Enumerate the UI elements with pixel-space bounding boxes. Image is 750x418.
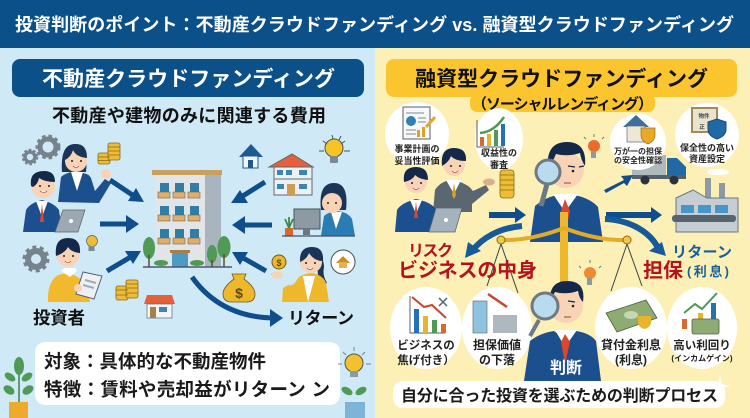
icon: coins	[98, 143, 120, 164]
icon: coins	[116, 280, 138, 300]
callout: target and features: 対象：具体的な不動産物件	[44, 351, 266, 372]
title banner: 投資判断のポイント：不動産クラウドファンディング vs. 融資型クラウドファンディング	[15, 14, 734, 35]
icon: house with red roof	[269, 154, 313, 195]
circle: collateral value decline: の下落	[479, 352, 515, 367]
circle: high yield: 高い利回り	[673, 338, 731, 352]
icon: sparkle	[709, 375, 731, 397]
person: man with laptop	[23, 171, 85, 232]
callout: decision process: 自分に合った投資を選ぶための判断プロセス	[401, 386, 718, 405]
section heading: real-estate crowdfunding: 不動産クラウドファンディング	[42, 67, 335, 91]
subheading: 不動産や建物のみに関連する費用	[52, 106, 326, 126]
label: interest: (利息)	[687, 264, 729, 279]
circle: collateral value decline: 担保価値	[473, 337, 521, 352]
icon: factory	[672, 169, 738, 232]
circle: secure asset setting: 保全性の高い	[680, 142, 734, 153]
arrowheads	[125, 188, 248, 265]
circle: business plan review: 妥当性評価	[394, 155, 440, 166]
icon: bulb	[579, 260, 601, 285]
circle: secure asset setting: 正	[699, 124, 705, 131]
icon: house	[144, 295, 175, 318]
circle: profitability review	[475, 108, 523, 170]
circle: collateral safety check: の安全性確認	[614, 155, 662, 165]
circle: loan interest	[595, 287, 667, 369]
icon: speech bubble with house	[331, 250, 355, 274]
circle: secure asset setting: 物件	[698, 112, 710, 120]
icon: orange bulb	[584, 134, 604, 158]
circle: loan interest: (利息)	[615, 352, 647, 367]
person: woman in yellow jacket	[271, 247, 329, 302]
circle: high yield: (インカムゲイン)	[671, 353, 733, 363]
icon: potted plant	[2, 357, 35, 418]
callout: target and features: 特徴：賃料や売却益がリターン ン	[44, 379, 330, 400]
circle: high yield	[667, 287, 737, 369]
icon: truck	[632, 155, 686, 184]
person: woman in navy suit	[58, 144, 111, 203]
label: investor: 投資者	[33, 308, 85, 328]
person: central analyst with magnifier	[530, 142, 603, 242]
callout: target and features	[35, 342, 340, 405]
arrow: toward return	[605, 219, 666, 256]
icon: money bag	[223, 274, 255, 302]
circle: collateral safety check: 万が一の担保	[614, 146, 662, 156]
arrows into building	[100, 180, 272, 271]
panel: real-estate crowdfunding	[0, 48, 375, 418]
icon: small house	[239, 144, 263, 168]
circle: collateral safety check	[610, 114, 666, 170]
balance scale	[487, 212, 642, 293]
panel: loan crowdfunding	[375, 48, 750, 418]
person: decision maker with magnifier: 判断	[550, 359, 582, 377]
arrow: toward risk	[465, 226, 522, 258]
circle: profitability review: 審査	[490, 159, 508, 170]
icon: coin stack	[500, 170, 514, 198]
section heading: loan crowdfunding	[386, 59, 737, 113]
return arrow	[192, 277, 283, 327]
title banner	[0, 0, 750, 48]
person: man with laptop	[395, 167, 462, 232]
label: return: リターン	[288, 309, 354, 328]
circle: loan interest: 貸付金利息	[601, 337, 661, 352]
icon: bulb plant	[338, 347, 371, 418]
circle: business default: ビジネスの	[397, 338, 455, 352]
person: decision maker with magnifier	[524, 281, 601, 381]
circle: business default	[390, 287, 462, 369]
icon: gears	[23, 136, 59, 164]
person: woman in yellow jacket: $	[276, 258, 282, 268]
person: man in grey suit	[433, 148, 495, 212]
icon: small bulb	[86, 236, 98, 251]
person: investor in yellow sweater	[48, 238, 102, 302]
section heading: loan crowdfunding: 融資型クラウドファンディング	[415, 67, 708, 91]
label: business substance: ビジネスの中身	[398, 259, 537, 282]
circle: profitability review: 収益性の	[481, 147, 517, 158]
section heading: loan crowdfunding: （ソーシャルレンディング）	[472, 95, 653, 113]
arrows: analysis flow	[489, 175, 662, 223]
building	[143, 170, 232, 267]
circle: collateral value decline	[462, 287, 532, 369]
label: return: リターン	[672, 244, 732, 261]
circle: business default: 焦げ付き）	[397, 353, 455, 367]
person: woman at computer	[282, 183, 355, 236]
icon: gear	[24, 247, 48, 271]
circle: secure asset setting	[675, 103, 739, 167]
callout: decision process	[393, 381, 725, 408]
circle: secure asset setting: 資産設定	[689, 153, 725, 164]
section heading: real-estate crowdfunding	[12, 59, 364, 97]
circle: business plan review: 事業計画の	[394, 143, 440, 154]
icon: money bag: $	[235, 285, 243, 301]
circle: business plan review	[385, 102, 449, 166]
label: collateral: 担保	[643, 259, 683, 282]
label: risk: リスク	[408, 242, 453, 260]
icon: light bulb	[319, 135, 350, 163]
